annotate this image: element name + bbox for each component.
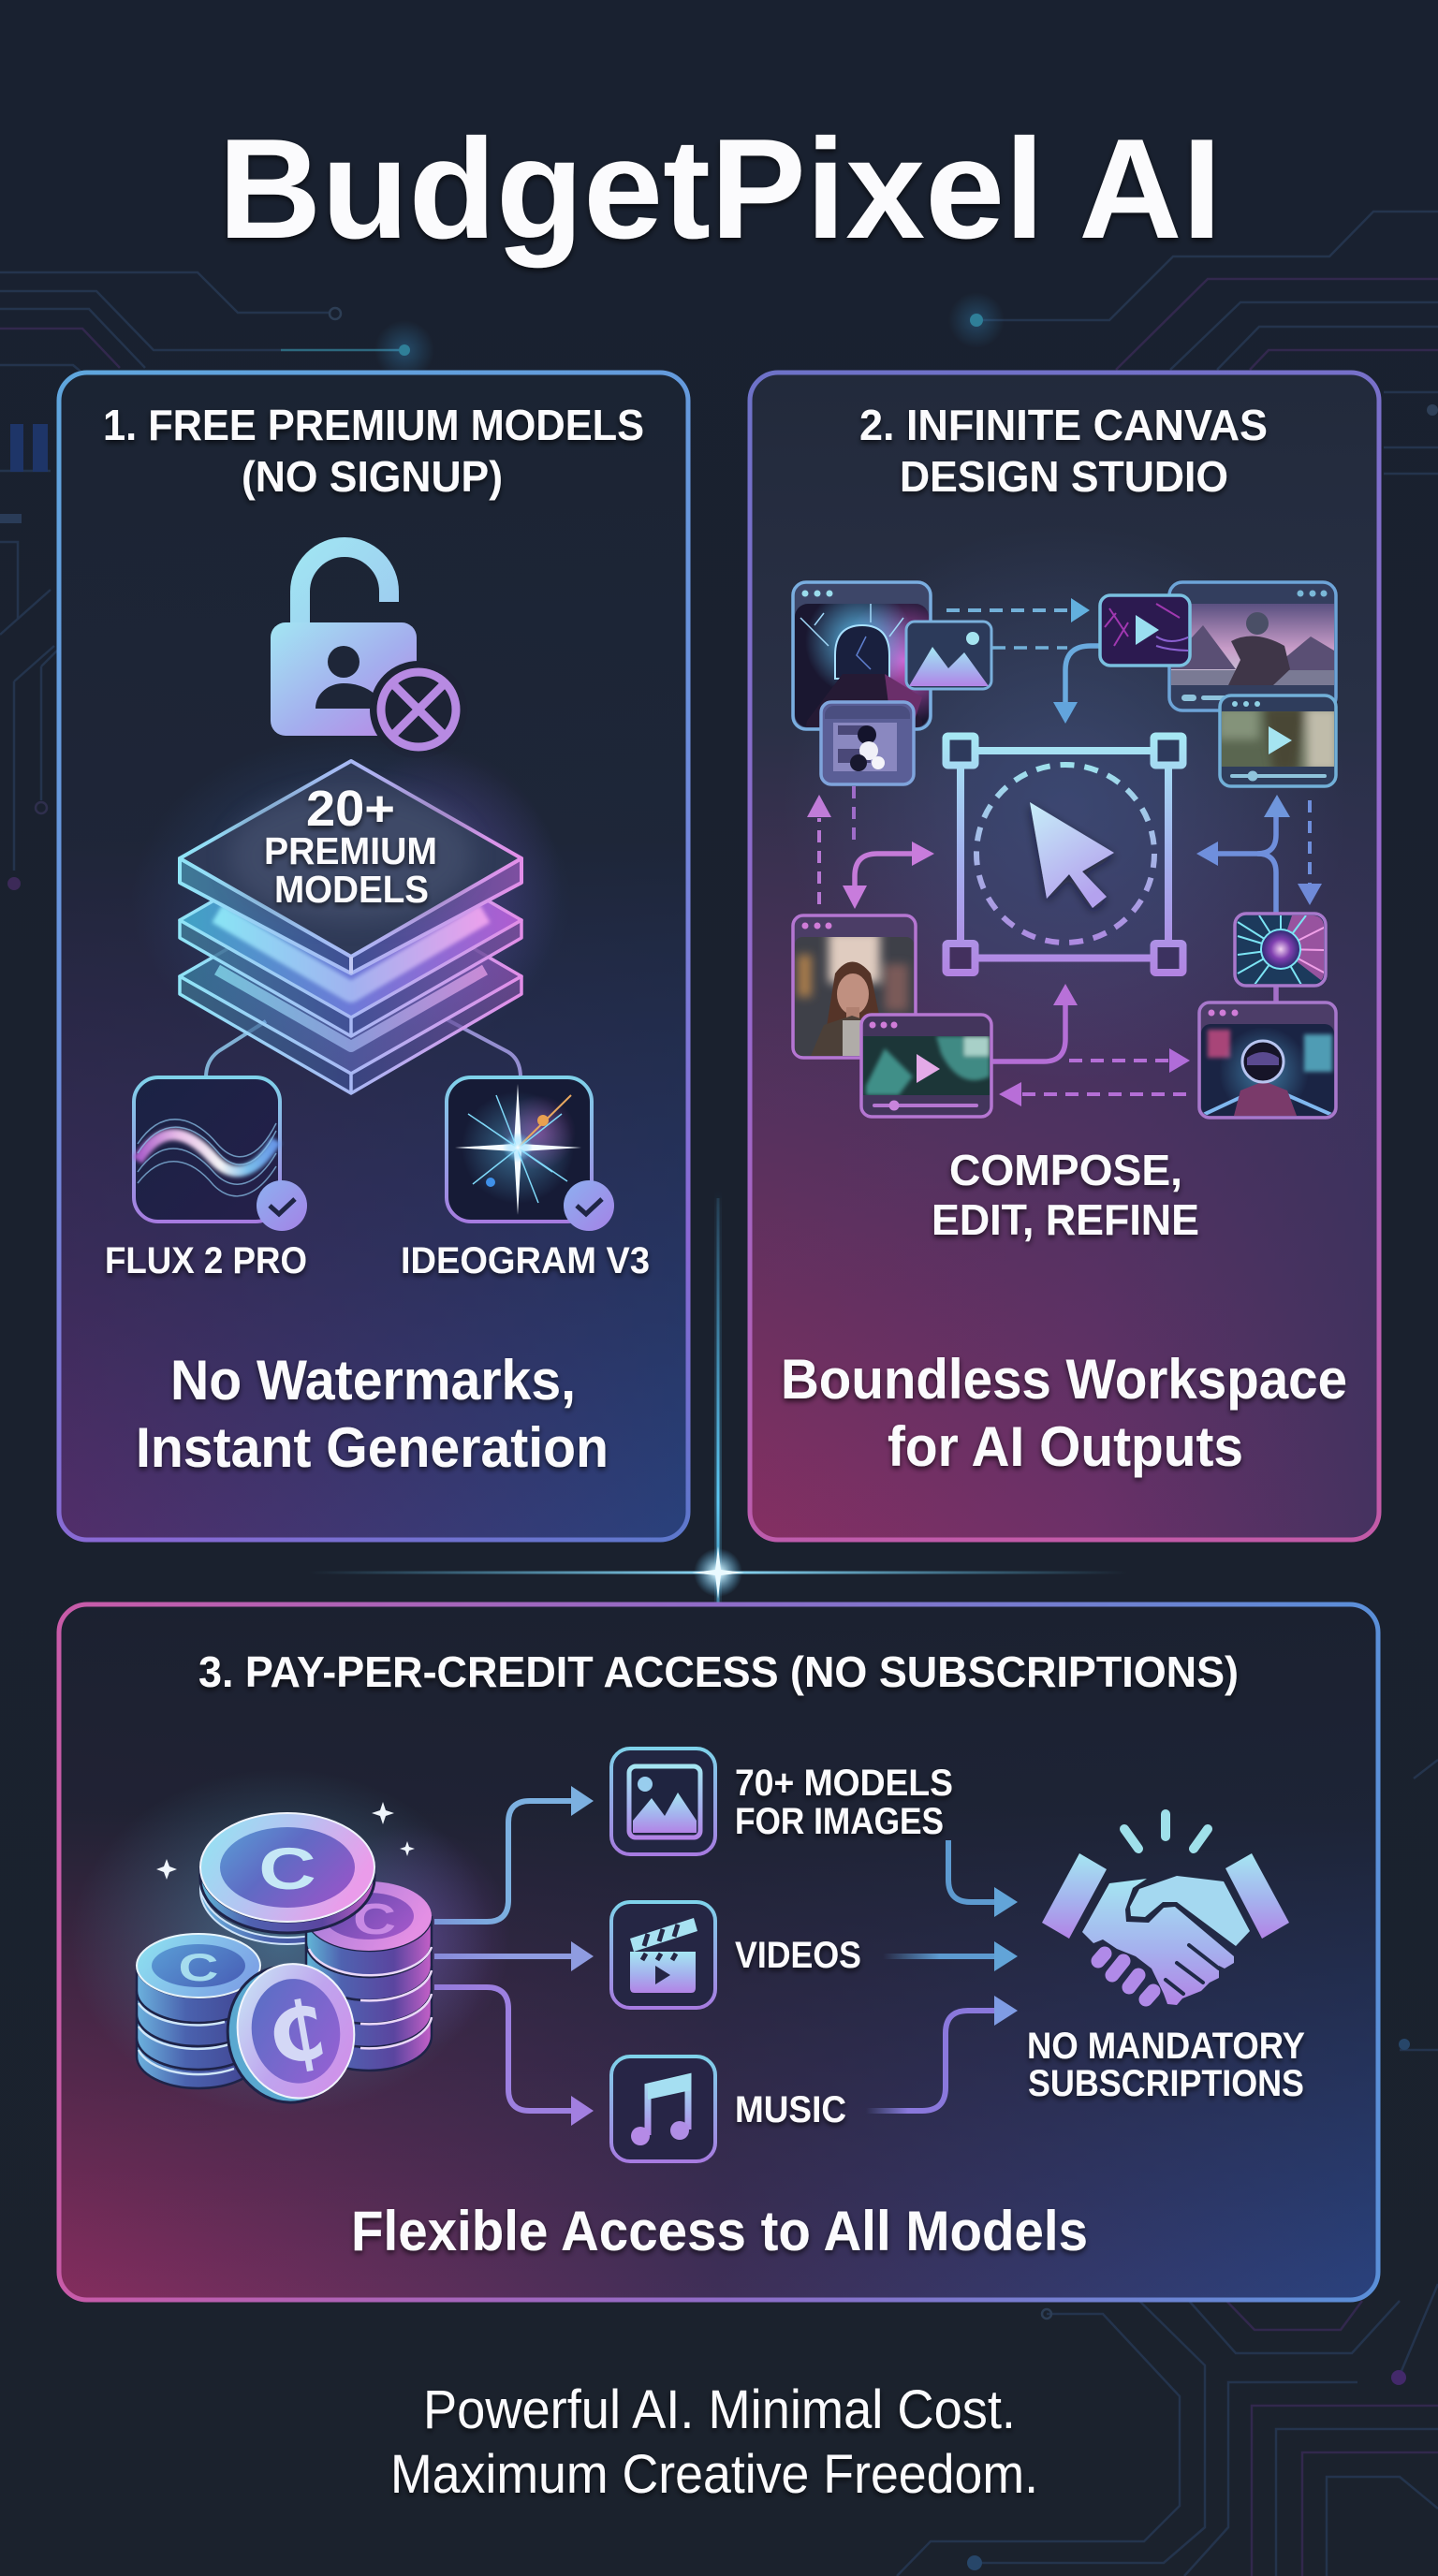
window: armored figure video (1169, 582, 1336, 710)
tile: music (611, 2056, 715, 2161)
window: teal video (861, 1015, 991, 1117)
layer 3 (180, 926, 521, 1093)
front coin (217, 1954, 365, 2112)
stack label: PREMIUM (264, 829, 437, 872)
stack label: 20+ (306, 781, 395, 837)
arrows from coins (434, 1786, 594, 2126)
thumbnail: video play (1100, 595, 1190, 666)
panel 1 heading (103, 401, 644, 501)
window: neon helmet figure (1199, 1003, 1336, 1118)
panel 2: infinite canvas design studio (750, 373, 1379, 1540)
panel 3: pay-per-credit access (59, 1604, 1378, 2300)
label: videos: VIDEOS (735, 1935, 861, 1976)
panel 2 heading (859, 401, 1268, 501)
label: no mandatory subscriptions: NO MANDATORY (1027, 2026, 1305, 2067)
check badge (257, 1180, 307, 1231)
layer 2 (180, 870, 521, 1036)
panel 1 tagline (136, 1349, 609, 1479)
left coin stack (137, 1934, 260, 2088)
label: compose, edit, refine: EDIT, REFINE (932, 1195, 1199, 1244)
icon: open lock with person and cross (271, 547, 467, 758)
tile: images (611, 1749, 715, 1854)
coin under top coin (200, 1883, 374, 1944)
icon: coin stacks (70, 1769, 510, 2115)
panel 1 heading: (NO SIGNUP) (242, 452, 503, 501)
panel 1: free premium models (59, 373, 688, 1540)
title: BudgetPixel AI (218, 110, 1222, 269)
icon: cursor arrow (1030, 802, 1114, 908)
panel 2 tagline (781, 1348, 1347, 1478)
sparkles (156, 1802, 415, 1880)
footer tagline (390, 2379, 1038, 2505)
arrows: top (946, 598, 1103, 724)
panel 1 tagline: Instant Generation (136, 1416, 609, 1479)
icon: Ideogram V3 starburst tile (447, 1077, 614, 1231)
footer tagline: Maximum Creative Freedom. (390, 2444, 1038, 2505)
stack of premium model layers (131, 735, 571, 1093)
arrows to handshake (866, 1840, 1018, 2111)
thumbnail: energy orb (1235, 914, 1326, 986)
thumbnail: image placeholder (906, 622, 991, 689)
label: music: MUSIC (735, 2089, 846, 2130)
panel 3 tagline: Flexible Access to All Models (351, 2200, 1088, 2262)
panel 2 heading: 2. INFINITE CANVAS (859, 401, 1268, 449)
right coin stack (306, 1881, 432, 2071)
check badge (564, 1180, 614, 1231)
top coin (200, 1813, 374, 1933)
label: compose, edit, refine (932, 1146, 1199, 1244)
front coin: ₵ (260, 1983, 332, 2085)
connector arrows (807, 598, 1322, 1106)
label: no mandatory subscriptions (1027, 2026, 1305, 2104)
label: 70+ models for images (735, 1763, 953, 1842)
label: 70+ models for images: FOR IMAGES (735, 1801, 944, 1842)
right coin stack: C (353, 1895, 396, 1943)
center selection frame with cursor (946, 736, 1183, 973)
panel 1 background (59, 373, 688, 1540)
panel 2 tagline: Boundless Workspace (781, 1348, 1347, 1411)
panel 3 heading: 3. PAY-PER-CREDIT ACCESS (NO SUBSCRIPTIONS) (198, 1647, 1239, 1696)
panel 1 heading: 1. FREE PREMIUM MODELS (103, 401, 644, 449)
panel 1 tagline: No Watermarks, (170, 1349, 576, 1412)
flow arrows (434, 1786, 1018, 2126)
label: no mandatory subscriptions: SUBSCRIPTIONS (1028, 2063, 1304, 2104)
window: hero portrait (791, 580, 932, 731)
stack label (264, 781, 437, 911)
arrows: right (1196, 795, 1322, 1003)
panel 2 heading: DESIGN STUDIO (900, 452, 1228, 501)
arrows: bottom (991, 984, 1190, 1106)
panel 2 tagline: for AI Outputs (888, 1415, 1243, 1478)
icon: Flux 2 Pro wave tile (134, 1077, 307, 1231)
connector lines (206, 1019, 521, 1077)
left coin stack: C (179, 1945, 218, 1989)
canvas diagram (793, 582, 1339, 1118)
label: Flux 2 Pro: FLUX 2 PRO (105, 1240, 307, 1281)
label: compose, edit, refine: COMPOSE, (949, 1146, 1182, 1194)
tile: videos (611, 1902, 715, 2008)
arrows: left (807, 786, 934, 909)
label: 70+ models for images: 70+ MODELS (735, 1763, 953, 1804)
label: Ideogram V3: IDEOGRAM V3 (401, 1240, 650, 1281)
window: abstract mask (821, 702, 914, 784)
panel 2 background (750, 373, 1379, 1540)
footer tagline: Powerful AI. Minimal Cost. (423, 2379, 1016, 2440)
top coin: C (258, 1836, 316, 1901)
central connector glow (309, 1198, 1127, 1604)
window: forest video (1217, 695, 1339, 786)
panel 3 background (59, 1604, 1378, 2300)
icon: handshake (1042, 1814, 1289, 2005)
layer 1 top (180, 761, 521, 973)
stack label: MODELS (274, 868, 429, 911)
window: woman portrait (793, 915, 916, 1058)
